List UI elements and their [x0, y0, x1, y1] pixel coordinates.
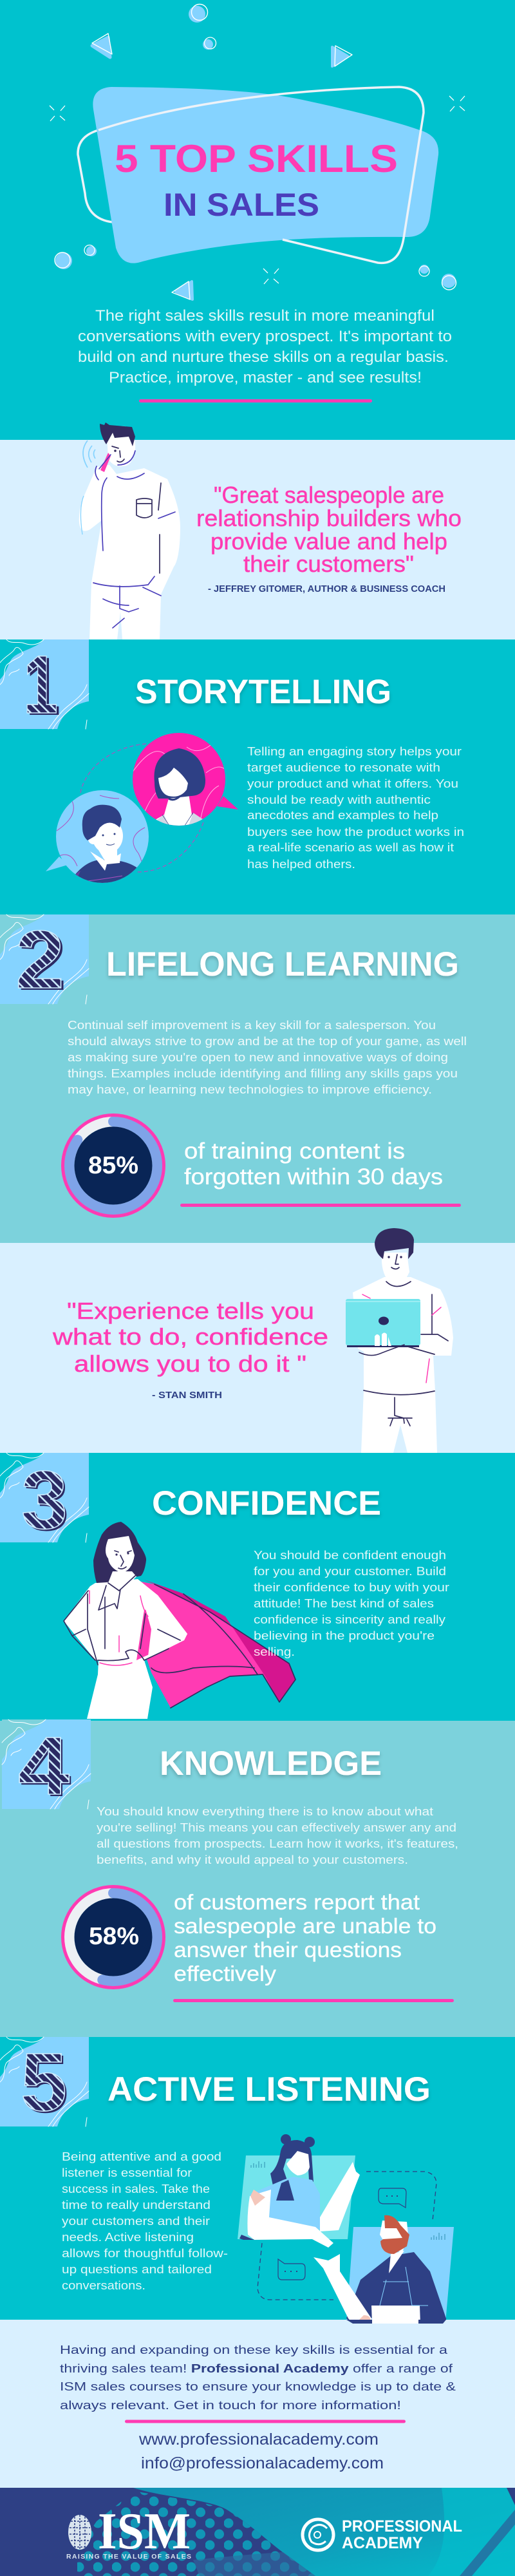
number 1 badge — [0, 639, 89, 733]
panel: closing message — [0, 2320, 515, 2488]
body text: Continual self improvement is a key skill for a salesperson. You — [68, 1019, 436, 1032]
Professional Academy logo — [303, 2517, 462, 2552]
number 3 badge — [0, 1453, 89, 1548]
Professional Academy logo: PROFESSIONAL — [342, 2517, 462, 2535]
number 2 badge: 2 — [18, 916, 67, 1008]
title line 1: 5 TOP SKILLS — [115, 137, 398, 180]
footer right accents — [428, 2488, 515, 2576]
intro text: build on and nurture these skills on a regular basis. — [78, 348, 449, 366]
body text: their confidence to buy with your — [254, 1581, 449, 1594]
quote text: their customers" — [243, 551, 414, 577]
statistic text: forgotten within 30 days — [184, 1164, 443, 1189]
body text: success in sales. Take the — [62, 2183, 210, 2195]
panel: 1 storytelling — [0, 639, 464, 892]
closing text: always relevant. Get in touch for more information! — [60, 2398, 401, 2412]
donut chart 85% — [63, 1115, 164, 1216]
dashed connectors — [80, 744, 203, 872]
body text — [254, 1549, 449, 1658]
body text: benefits, and why it would appeal to your customers. — [97, 1853, 408, 1866]
closing text: thriving sales team! Professional Academy offer a range of — [60, 2362, 453, 2375]
number 4 badge: 4 — [18, 1720, 70, 1812]
body text: selling. — [254, 1645, 295, 1658]
quote text — [52, 1298, 328, 1377]
website link: www.professionalacademy.com — [138, 2430, 379, 2448]
statistic text: of customers report that — [174, 1890, 420, 1914]
heading: KNOWLEDGE — [160, 1745, 382, 1783]
body text — [97, 1805, 458, 1866]
body text: buyers see how the product works in — [247, 826, 464, 838]
body text: You should know everything there is to know about what — [97, 1805, 433, 1818]
statistic text — [174, 1890, 436, 1985]
body text: may have, or learning new technologies to improve efficiency. — [68, 1083, 432, 1096]
number 1 badge: 1 — [23, 639, 58, 731]
Professional Academy logo: ACADEMY — [342, 2534, 423, 2552]
number 2 badge — [0, 914, 89, 1008]
statistic text: answer their questions — [174, 1938, 402, 1962]
number 2 badge: 2 — [15, 914, 64, 1006]
illustration: man with laptop — [346, 1228, 453, 1453]
body text: attitude! The best kind of sales — [254, 1597, 434, 1610]
intro divider — [139, 399, 372, 402]
number 5 badge: 5 — [23, 2038, 69, 2130]
panel: 2 lifelong learning — [0, 914, 515, 1243]
closing text: ISM sales courses to ensure your knowledge is up to date & — [60, 2380, 456, 2393]
ISM logo: ISM — [98, 2503, 191, 2560]
panel: Jeffrey Gitomer quote — [0, 422, 515, 639]
donut chart 58%: 58% — [89, 1923, 139, 1950]
quote text: relationship builders who — [196, 505, 462, 531]
quote text: what to do, confidence — [52, 1323, 328, 1350]
floating shape decorations — [50, 4, 465, 299]
body text — [247, 745, 464, 871]
number 3 badge: 3 — [23, 1456, 70, 1548]
body text: allows for thoughtful follow- — [62, 2247, 228, 2260]
number 4 badge: 4 — [20, 1722, 71, 1814]
illustration: video call — [238, 2134, 454, 2324]
title line 2: IN SALES — [164, 187, 319, 223]
body text: anecdotes and examples to help — [247, 809, 438, 822]
number 3 badge: 3 — [21, 1454, 68, 1546]
closing divider — [125, 2420, 406, 2423]
heading: LIFELONG LEARNING — [106, 945, 459, 983]
closing text: Having and expanding on these key skills is essential for a — [60, 2343, 448, 2356]
quote text — [196, 482, 462, 577]
panel: Stan Smith quote — [0, 1228, 515, 1453]
body text: You should be confident enough — [254, 1549, 446, 1562]
footer dots — [77, 2488, 322, 2576]
intro text: Practice, improve, master - and see results! — [109, 369, 422, 386]
title blob — [93, 87, 438, 263]
heading: STORYTELLING — [135, 673, 391, 711]
body text: confidence is sincerity and really — [254, 1613, 445, 1626]
statistic text — [184, 1139, 443, 1189]
statistic text: salespeople are unable to — [174, 1914, 436, 1938]
panel: 5 active listening — [0, 2036, 454, 2324]
number 4 badge — [2, 1719, 91, 1814]
illustration: man on phone — [79, 422, 180, 639]
intro text: The right sales skills result in more meaningful — [95, 307, 435, 325]
panel: footer — [0, 2488, 515, 2576]
quote text: provide value and help — [211, 528, 447, 554]
man's lower body overlapping panel — [346, 2320, 446, 2324]
illustration: man speech bubble — [46, 790, 149, 892]
donut chart 85%: 85% — [88, 1152, 138, 1179]
heading: ACTIVE LISTENING — [108, 2070, 431, 2108]
body text: your product and what it offers. You — [247, 777, 458, 790]
illustration: woman speech bubble — [132, 733, 238, 831]
body text: your customers and their — [62, 2215, 210, 2228]
body text: needs. Active listening — [62, 2231, 194, 2244]
title frame outline (behind blob) — [78, 130, 113, 222]
footer teal shape — [133, 2488, 515, 2576]
body text: time to really understand — [62, 2199, 211, 2211]
body text — [62, 2150, 228, 2292]
number 5 badge — [0, 2036, 89, 2130]
body text: you're selling! This means you can effectively answer any and — [97, 1821, 456, 1834]
intro text: conversations with every prospect. It's important to — [78, 328, 452, 345]
body text: up questions and tailored — [62, 2263, 212, 2276]
number 5 badge: 5 — [21, 2036, 67, 2128]
statistic text: of training content is — [184, 1139, 405, 1164]
body text: has helped others. — [247, 858, 355, 871]
statistic text: effectively — [174, 1962, 277, 1985]
quote attribution: - JEFFREY GITOMER, AUTHOR & BUSINESS COACH — [208, 584, 445, 594]
quote attribution: - STAN SMITH — [152, 1390, 222, 1401]
email link: info@professionalacademy.com — [141, 2454, 384, 2472]
ISM logo: RAISING THE VALUE OF SALES — [66, 2553, 191, 2561]
donut chart 58% — [63, 1887, 164, 1987]
body text: Telling an engaging story helps your — [247, 745, 462, 758]
quote text: "Experience tells you — [67, 1298, 314, 1324]
header panel — [50, 4, 465, 402]
body text: for you and your customer. Build — [254, 1565, 446, 1578]
body text: all questions from prospects. Learn how it works, it's features, — [97, 1837, 458, 1850]
panel: 4 knowledge — [0, 1719, 515, 2037]
body text: should always strive to grow and be at the top of your game, as well — [68, 1035, 467, 1048]
body text: should be ready with authentic — [247, 793, 431, 806]
statistic divider — [180, 1204, 461, 1207]
closing text — [60, 2343, 456, 2412]
statistic divider — [173, 1999, 454, 2002]
body text: things. Examples include identifying and filling any skills gaps you — [68, 1067, 458, 1080]
intro text — [78, 307, 452, 386]
body text: target audience to resonate with — [247, 761, 440, 774]
number 1 badge: 1 — [26, 641, 61, 733]
quote text: allows you to do it " — [74, 1350, 306, 1377]
illustration: woman with cape — [64, 1522, 295, 1719]
panel: 3 confidence — [0, 1453, 449, 1719]
body text: a real-life scenario as well as how it — [247, 841, 454, 854]
body text: Being attentive and a good — [62, 2150, 221, 2163]
man's lower shirt overlapping panel — [372, 2320, 418, 2324]
body text: listener is essential for — [62, 2166, 192, 2179]
heading: CONFIDENCE — [152, 1484, 381, 1522]
body text: conversations. — [62, 2279, 145, 2292]
body text: as making sure you're open to new and innovative ways of doing — [68, 1051, 448, 1064]
title frame outline (in front) — [98, 87, 424, 263]
body text — [68, 1019, 467, 1096]
quote text: "Great salespeople are — [214, 482, 444, 508]
body text: believing in the product you're — [254, 1629, 435, 1642]
